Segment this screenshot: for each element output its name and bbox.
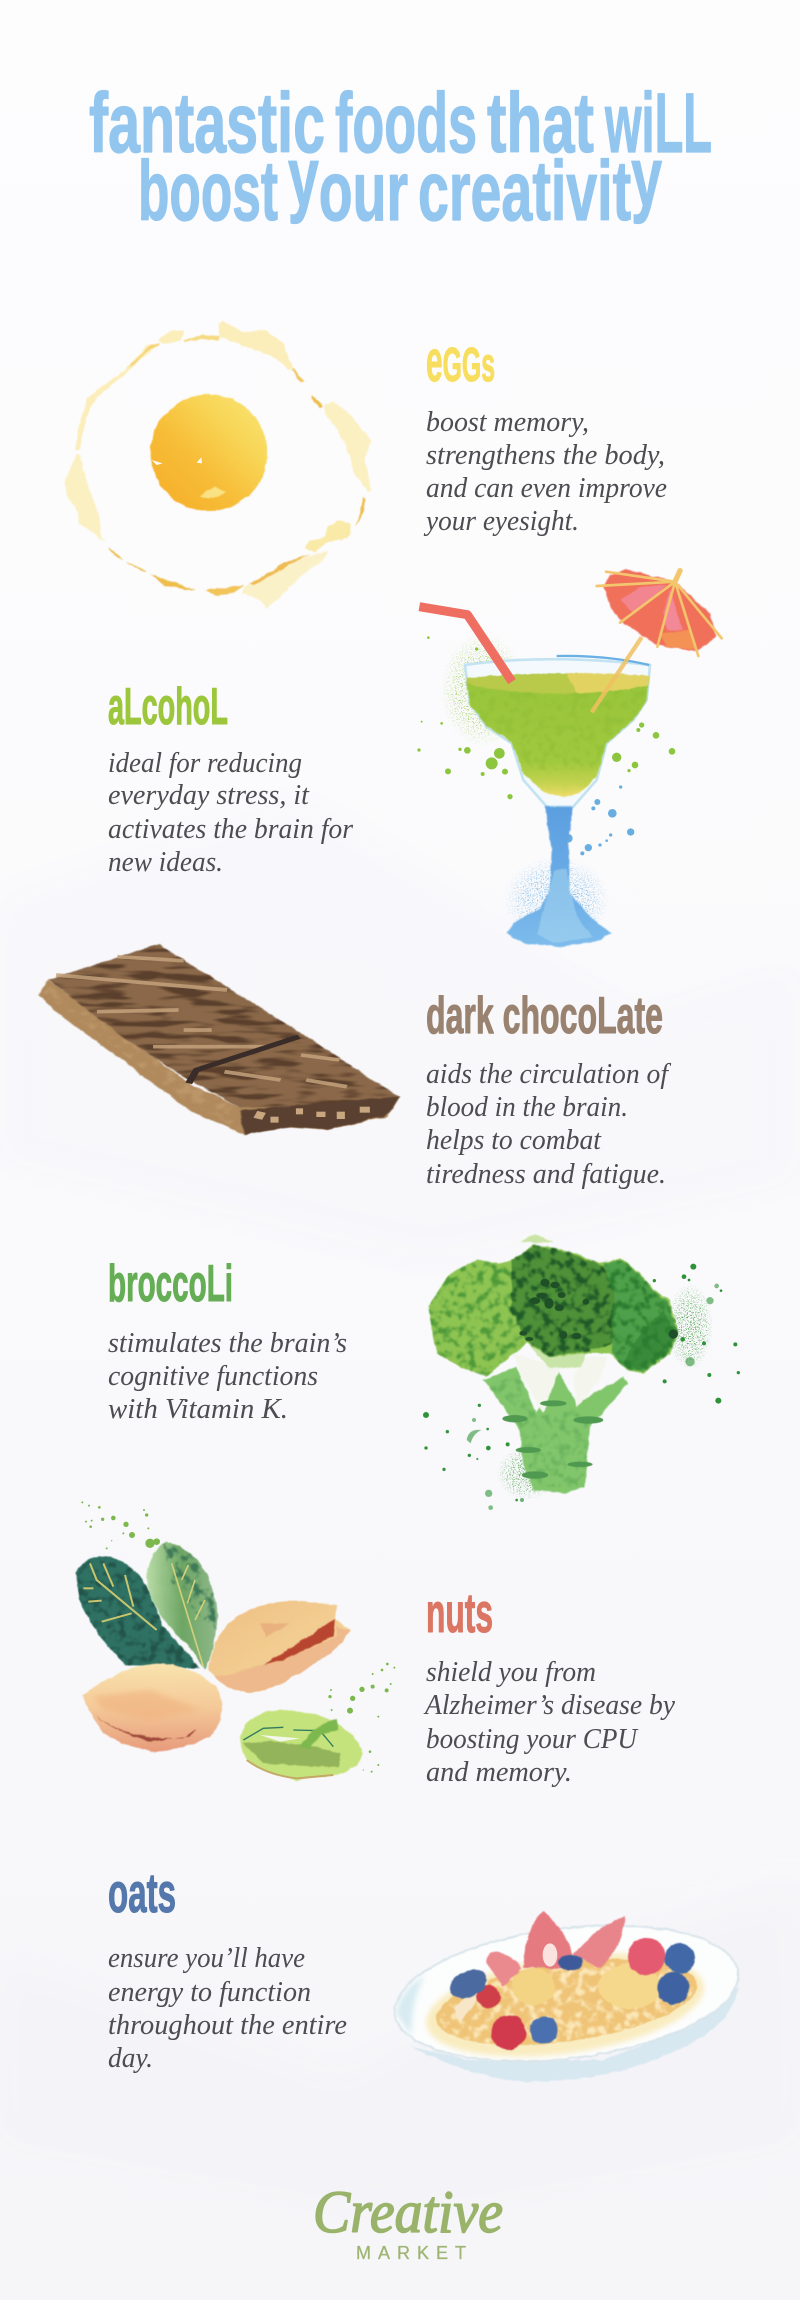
heading: nuts: nuts	[426, 1581, 493, 1644]
panel: alcohol	[108, 569, 722, 947]
straw	[419, 607, 512, 682]
oats	[431, 1944, 703, 2059]
panel: dark chocolate	[38, 944, 672, 1190]
logo: Creative Market: MARKET	[356, 2243, 466, 2263]
heading: dark chocolate: dark chocoLate	[426, 987, 663, 1045]
text: eggs description	[423, 406, 667, 537]
text: eggs description: boost memory,	[426, 406, 589, 438]
heading: eggs: eGGs	[426, 329, 495, 394]
icon: pistachios and leaves	[76, 1501, 395, 1780]
title: boost	[138, 144, 278, 238]
title: y	[288, 130, 319, 224]
panel: eggs	[65, 322, 667, 608]
bowl	[387, 1908, 746, 2082]
text: broccoli description: stimulates the brain’s	[108, 1327, 347, 1359]
text: eggs description: strengthens the body,	[426, 439, 665, 471]
left leaf	[76, 1557, 200, 1668]
text: dark chocolate description	[426, 1058, 672, 1190]
icon: broccoli	[423, 1234, 740, 1510]
text: nuts description	[423, 1656, 675, 1788]
text: oats description: throughout the entire	[108, 2009, 347, 2041]
panel: broccoli	[108, 1234, 740, 1510]
icon: bowl of oats	[387, 1908, 746, 2082]
text: dark chocolate description: helps to combat	[426, 1124, 602, 1156]
text: nuts description: and memory.	[426, 1756, 572, 1788]
umbrella	[592, 569, 722, 712]
text: nuts description: Alzheimer’s disease by	[423, 1689, 675, 1721]
text: broccoli description: cognitive functions	[108, 1360, 318, 1392]
heading: broccoli: broccoLi	[108, 1255, 233, 1313]
icon: fried egg	[65, 322, 372, 608]
text: alcohol description	[108, 747, 354, 878]
text: alcohol description: everyday stress, it	[108, 779, 310, 811]
text: broccoli description: with Vitamin K.	[108, 1393, 288, 1425]
left pistachio	[83, 1663, 222, 1752]
heading: alcohol: aLcohoL	[108, 678, 228, 736]
text: alcohol description: activates the brain for	[108, 813, 354, 845]
stalk	[483, 1367, 628, 1493]
right leaf	[147, 1542, 217, 1670]
text: alcohol description: new ideas.	[108, 846, 223, 878]
title	[89, 76, 712, 238]
text: oats description: day.	[108, 2042, 153, 2074]
title: fantastic	[89, 76, 325, 170]
panel: nuts	[76, 1501, 675, 1788]
text: eggs description: your eyesight.	[423, 505, 579, 537]
berries	[445, 1938, 695, 2050]
icon: chocolate bar	[38, 944, 399, 1135]
text: eggs description: and can even improve	[426, 472, 667, 504]
bananas	[453, 1965, 662, 2022]
logo: Creative Market: Creative	[313, 2179, 503, 2245]
text: oats description	[108, 1942, 347, 2074]
text: dark chocolate description: aids the circulation of	[426, 1058, 672, 1090]
text: dark chocolate description: blood in the brain.	[426, 1091, 628, 1123]
icon: cocktail	[417, 569, 722, 947]
strawberries	[487, 1912, 625, 1987]
title: wiLL	[604, 76, 712, 170]
title: creativit	[418, 144, 740, 238]
panel: oats	[108, 1861, 746, 2082]
florets	[428, 1245, 678, 1377]
text: dark chocolate description: tiredness and fatigue.	[426, 1158, 666, 1190]
green pistachio	[240, 1710, 363, 1780]
text: broccoli description	[108, 1327, 347, 1425]
text: oats description: ensure you’ll have	[108, 1942, 305, 1974]
text: oats description: energy to function	[108, 1976, 311, 2008]
title: y	[631, 130, 662, 224]
title: our	[319, 144, 408, 238]
right pistachio	[208, 1601, 350, 1693]
heading: oats: oats	[108, 1861, 176, 1924]
title: foods	[335, 76, 477, 170]
title: that	[487, 76, 594, 170]
text: nuts description: boosting your CPU	[426, 1723, 639, 1755]
text: alcohol description: ideal for reducing	[108, 747, 302, 779]
text: nuts description: shield you from	[426, 1656, 596, 1688]
